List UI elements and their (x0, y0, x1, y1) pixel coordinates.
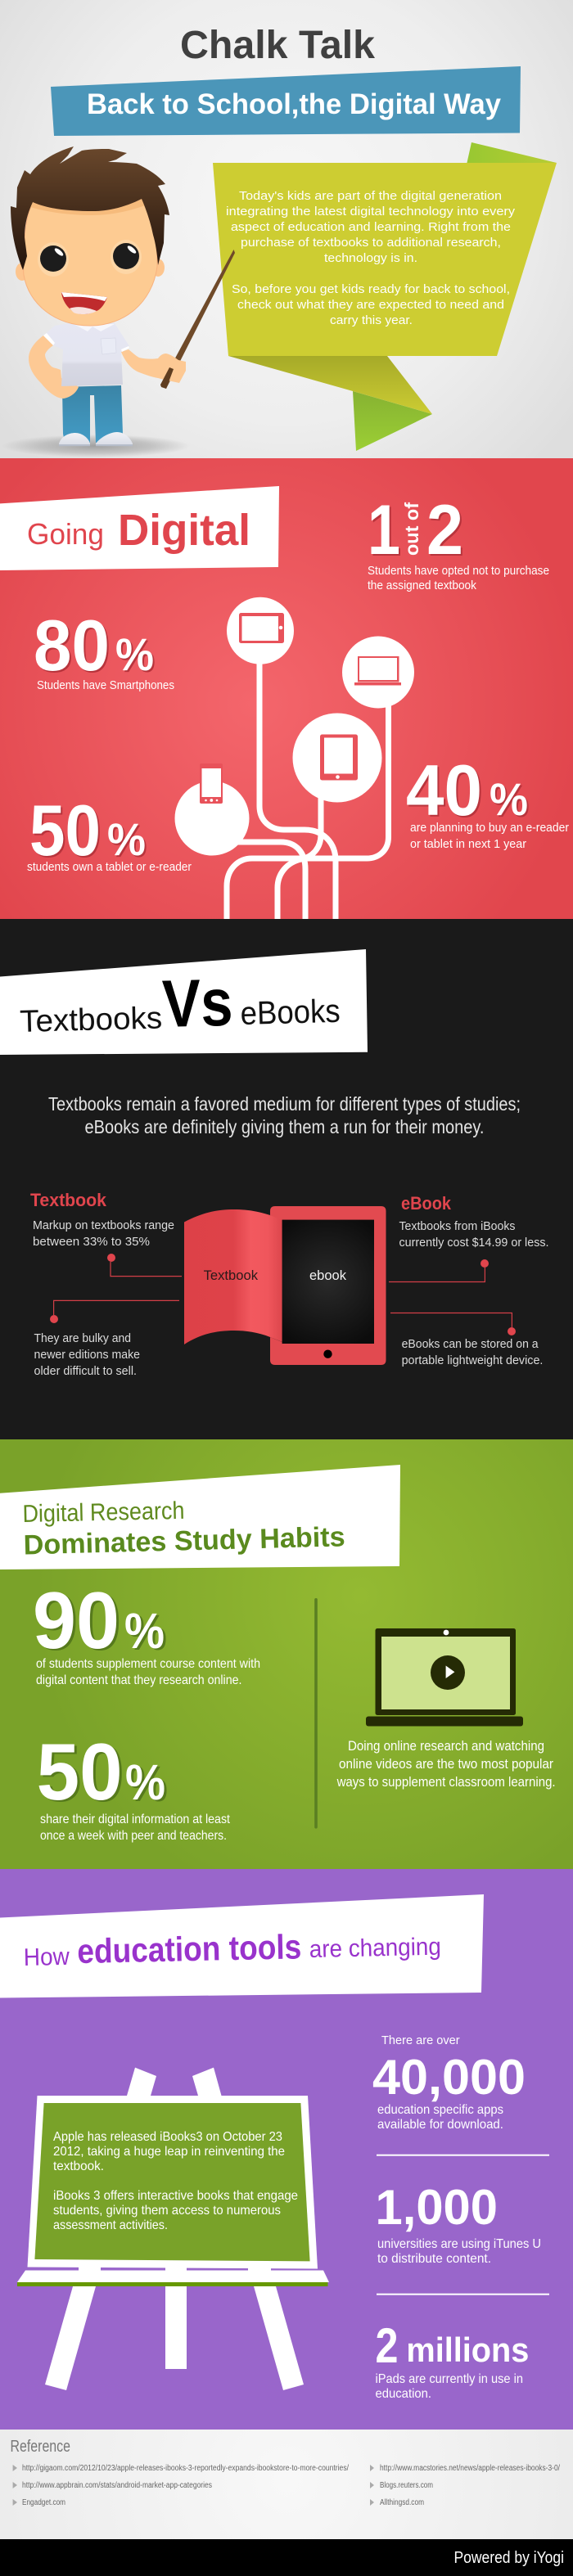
stat: 1 out of 2: out of (401, 502, 422, 556)
icon: laptop with video (366, 1628, 523, 1727)
reference list left: http://www.appbrain.com/stats/android-market-app-categories (22, 2481, 212, 2490)
footer (0, 2539, 573, 2576)
heading banner: Digital (118, 506, 250, 555)
reference heading: Reference (10, 2438, 70, 2456)
ribbon callout: carry this year. (330, 313, 413, 327)
stat: 80%: % (115, 628, 154, 680)
stat: 40,000 apps: education specific apps (377, 2103, 503, 2117)
ebook notes: eBooks can be stored on a (402, 1337, 539, 1351)
ribbon callout: Today's kids are part of the digital generation (239, 189, 502, 203)
divider (314, 1598, 318, 1828)
textbook notes: Textbook (30, 1190, 107, 1210)
stat: 50%: 50 (37, 1727, 123, 1817)
stat: 80%: Students have Smartphones (37, 678, 174, 692)
stat: 1,000 universities: 1,000 (375, 2180, 498, 2235)
stat: 1,000 universities: to distribute content. (377, 2252, 491, 2266)
section: digital research (0, 1439, 573, 1869)
ribbon callout: So, before you get kids ready for back to school, (232, 282, 510, 296)
heading banner: eBooks (240, 993, 341, 1032)
stat: 1 out of 2: 2 (426, 491, 463, 570)
section: textbooks vs ebooks (0, 919, 573, 1439)
stat: 40%: % (490, 773, 528, 825)
book and tablet illustration: ebook (309, 1268, 346, 1283)
stat: 90%: % (124, 1603, 165, 1659)
book and tablet illustration: Textbook (204, 1268, 258, 1283)
stat: 50% (37, 1727, 230, 1843)
purple background (0, 1869, 573, 2430)
stat: 1,000 universities (375, 2180, 541, 2266)
reference list right: Blogs.reuters.com (380, 2481, 433, 2490)
stat: 90%: of students supplement course content with (36, 1657, 260, 1671)
ebook notes: Textbooks from iBooks (399, 1219, 516, 1233)
ebook notes: eBook (401, 1193, 452, 1214)
heading banner: Digital Research (22, 1497, 185, 1528)
subtitle banner: Back to School,the Digital Way (87, 88, 502, 120)
stat: 40,000 apps (372, 2033, 526, 2132)
ribbon callout: technology is in. (324, 251, 417, 265)
reference background (0, 2430, 573, 2539)
stat: 40%: or tablet in next 1 year (410, 837, 526, 851)
stat: 50%: share their digital information at least (40, 1813, 230, 1826)
connector lines (211, 659, 388, 919)
section: references (0, 2430, 573, 2539)
red background (0, 458, 573, 919)
ribbon callout: aspect of education and learning. Right from the (231, 220, 511, 234)
stat: 50%: % (125, 1754, 165, 1810)
stat: 40,000 apps: 40,000 (372, 2050, 526, 2105)
stat: 1 out of 2: the assigned textbook (368, 579, 476, 592)
ribbon callout: purchase of textbooks to additional research, (241, 236, 501, 250)
section: going digital (0, 458, 573, 919)
stat: 40%: 40 (406, 750, 482, 831)
heading banner: Dominates Study Habits (23, 1521, 345, 1560)
ebook notes: currently cost $14.99 or less. (399, 1236, 548, 1250)
ebook notes: portable lightweight device. (402, 1353, 543, 1367)
stat: 90%: digital content that they research online. (36, 1673, 242, 1687)
stat: 40,000 apps: available for download. (377, 2118, 503, 2132)
stat: 80%: 80 (34, 605, 110, 686)
icon: laptop (342, 637, 414, 709)
ribbon callout: integrating the latest digital technology into every (226, 205, 516, 218)
reference list left: Engadget.com (22, 2498, 65, 2507)
heading banner: Textbooks (20, 1001, 163, 1039)
ebook notes (389, 1193, 548, 1367)
stat: 50%: % (107, 813, 146, 865)
title: Chalk Talk (180, 24, 375, 67)
stat: 1 out of 2 (368, 491, 549, 592)
stat: 50% (27, 790, 192, 874)
stat: 1,000 universities: universities are using iTunes U (377, 2237, 541, 2251)
heading banner (0, 1465, 400, 1569)
online video note: Doing online research and watching (348, 1738, 544, 1754)
heading banner: How (23, 1943, 70, 1971)
reference list right (370, 2464, 560, 2507)
reference list left (13, 2464, 349, 2507)
online video note: online videos are the two most popular (339, 1756, 553, 1772)
stat: 2 millions iPads (375, 2318, 529, 2401)
stat: 90%: 90 (33, 1575, 120, 1665)
dark background (0, 919, 573, 1439)
intro background (0, 0, 573, 458)
heading banner: education tools (77, 1927, 302, 1970)
character: teacher boy (2, 146, 235, 457)
intro text: eBooks are definitely giving them a run for their money. (85, 1116, 485, 1137)
easel with chalkboard: assessment activities. (53, 2218, 168, 2232)
stat: 50%: students own a tablet or e-reader (27, 860, 192, 874)
heading banner: Vs (161, 966, 233, 1042)
ribbon callout: check out what they are expected to need and (237, 298, 504, 312)
easel with chalkboard: textbook. (53, 2159, 104, 2173)
easel with chalkboard: 2012, taking a huge leap in reinventing the (53, 2145, 285, 2159)
textbook notes: between 33% to 35% (33, 1235, 150, 1249)
stat: 40% (406, 750, 569, 851)
heading banner: are changing (309, 1934, 441, 1963)
stat: 2 millions iPads: millions (406, 2331, 529, 2369)
reference list right: Allthingsd.com (380, 2498, 424, 2507)
online video note (336, 1738, 556, 1790)
section: education tools (0, 1869, 573, 2430)
ribbon callout (213, 142, 557, 451)
green background (0, 1439, 573, 1869)
stat: 50%: once a week with peer and teachers. (40, 1829, 227, 1843)
stat: 2 millions iPads: iPads are currently in use in (375, 2372, 523, 2386)
textbook notes: Markup on textbooks range (33, 1218, 174, 1232)
book and tablet illustration (184, 1206, 386, 1365)
stat: 90% (33, 1575, 260, 1687)
textbook notes (30, 1190, 182, 1378)
easel with chalkboard: students, giving them access to numerous (53, 2204, 281, 2218)
section: intro (0, 0, 573, 458)
textbook notes: older difficult to sell. (34, 1364, 137, 1378)
stat: 50%: 50 (29, 790, 101, 871)
heading banner (0, 486, 279, 570)
textbook notes: They are bulky and (34, 1331, 131, 1345)
textbook notes: newer editions make (34, 1348, 140, 1362)
stat: 80% (34, 605, 174, 692)
stat: 1 out of 2: Students have opted not to purchase (368, 564, 549, 578)
stat: 1 out of 2: 1 (368, 491, 400, 570)
heading banner (0, 949, 368, 1055)
heading banner (0, 1894, 484, 1998)
subtitle banner (51, 66, 521, 136)
icon: smartphone (175, 763, 249, 856)
reference list left: http://gigaom.com/2012/10/23/apple-releases-ibooks-3-reportedly-expands-ibookstore-to-more-countries/ (22, 2464, 349, 2473)
easel with chalkboard: Apple has released iBooks3 on October 23 (53, 2130, 282, 2144)
stat: 2 millions iPads: education. (375, 2387, 431, 2401)
stat: 40,000 apps: There are over (381, 2033, 460, 2047)
heading banner: Going (27, 517, 104, 551)
icon: portrait tablet (293, 714, 381, 802)
intro text (48, 1093, 521, 1137)
stat: 2 millions iPads: 2 (375, 2318, 398, 2373)
easel with chalkboard: iBooks 3 offers interactive books that engage (53, 2189, 298, 2203)
easel with chalkboard (17, 2068, 329, 2390)
icon: landscape tablet (227, 597, 294, 664)
